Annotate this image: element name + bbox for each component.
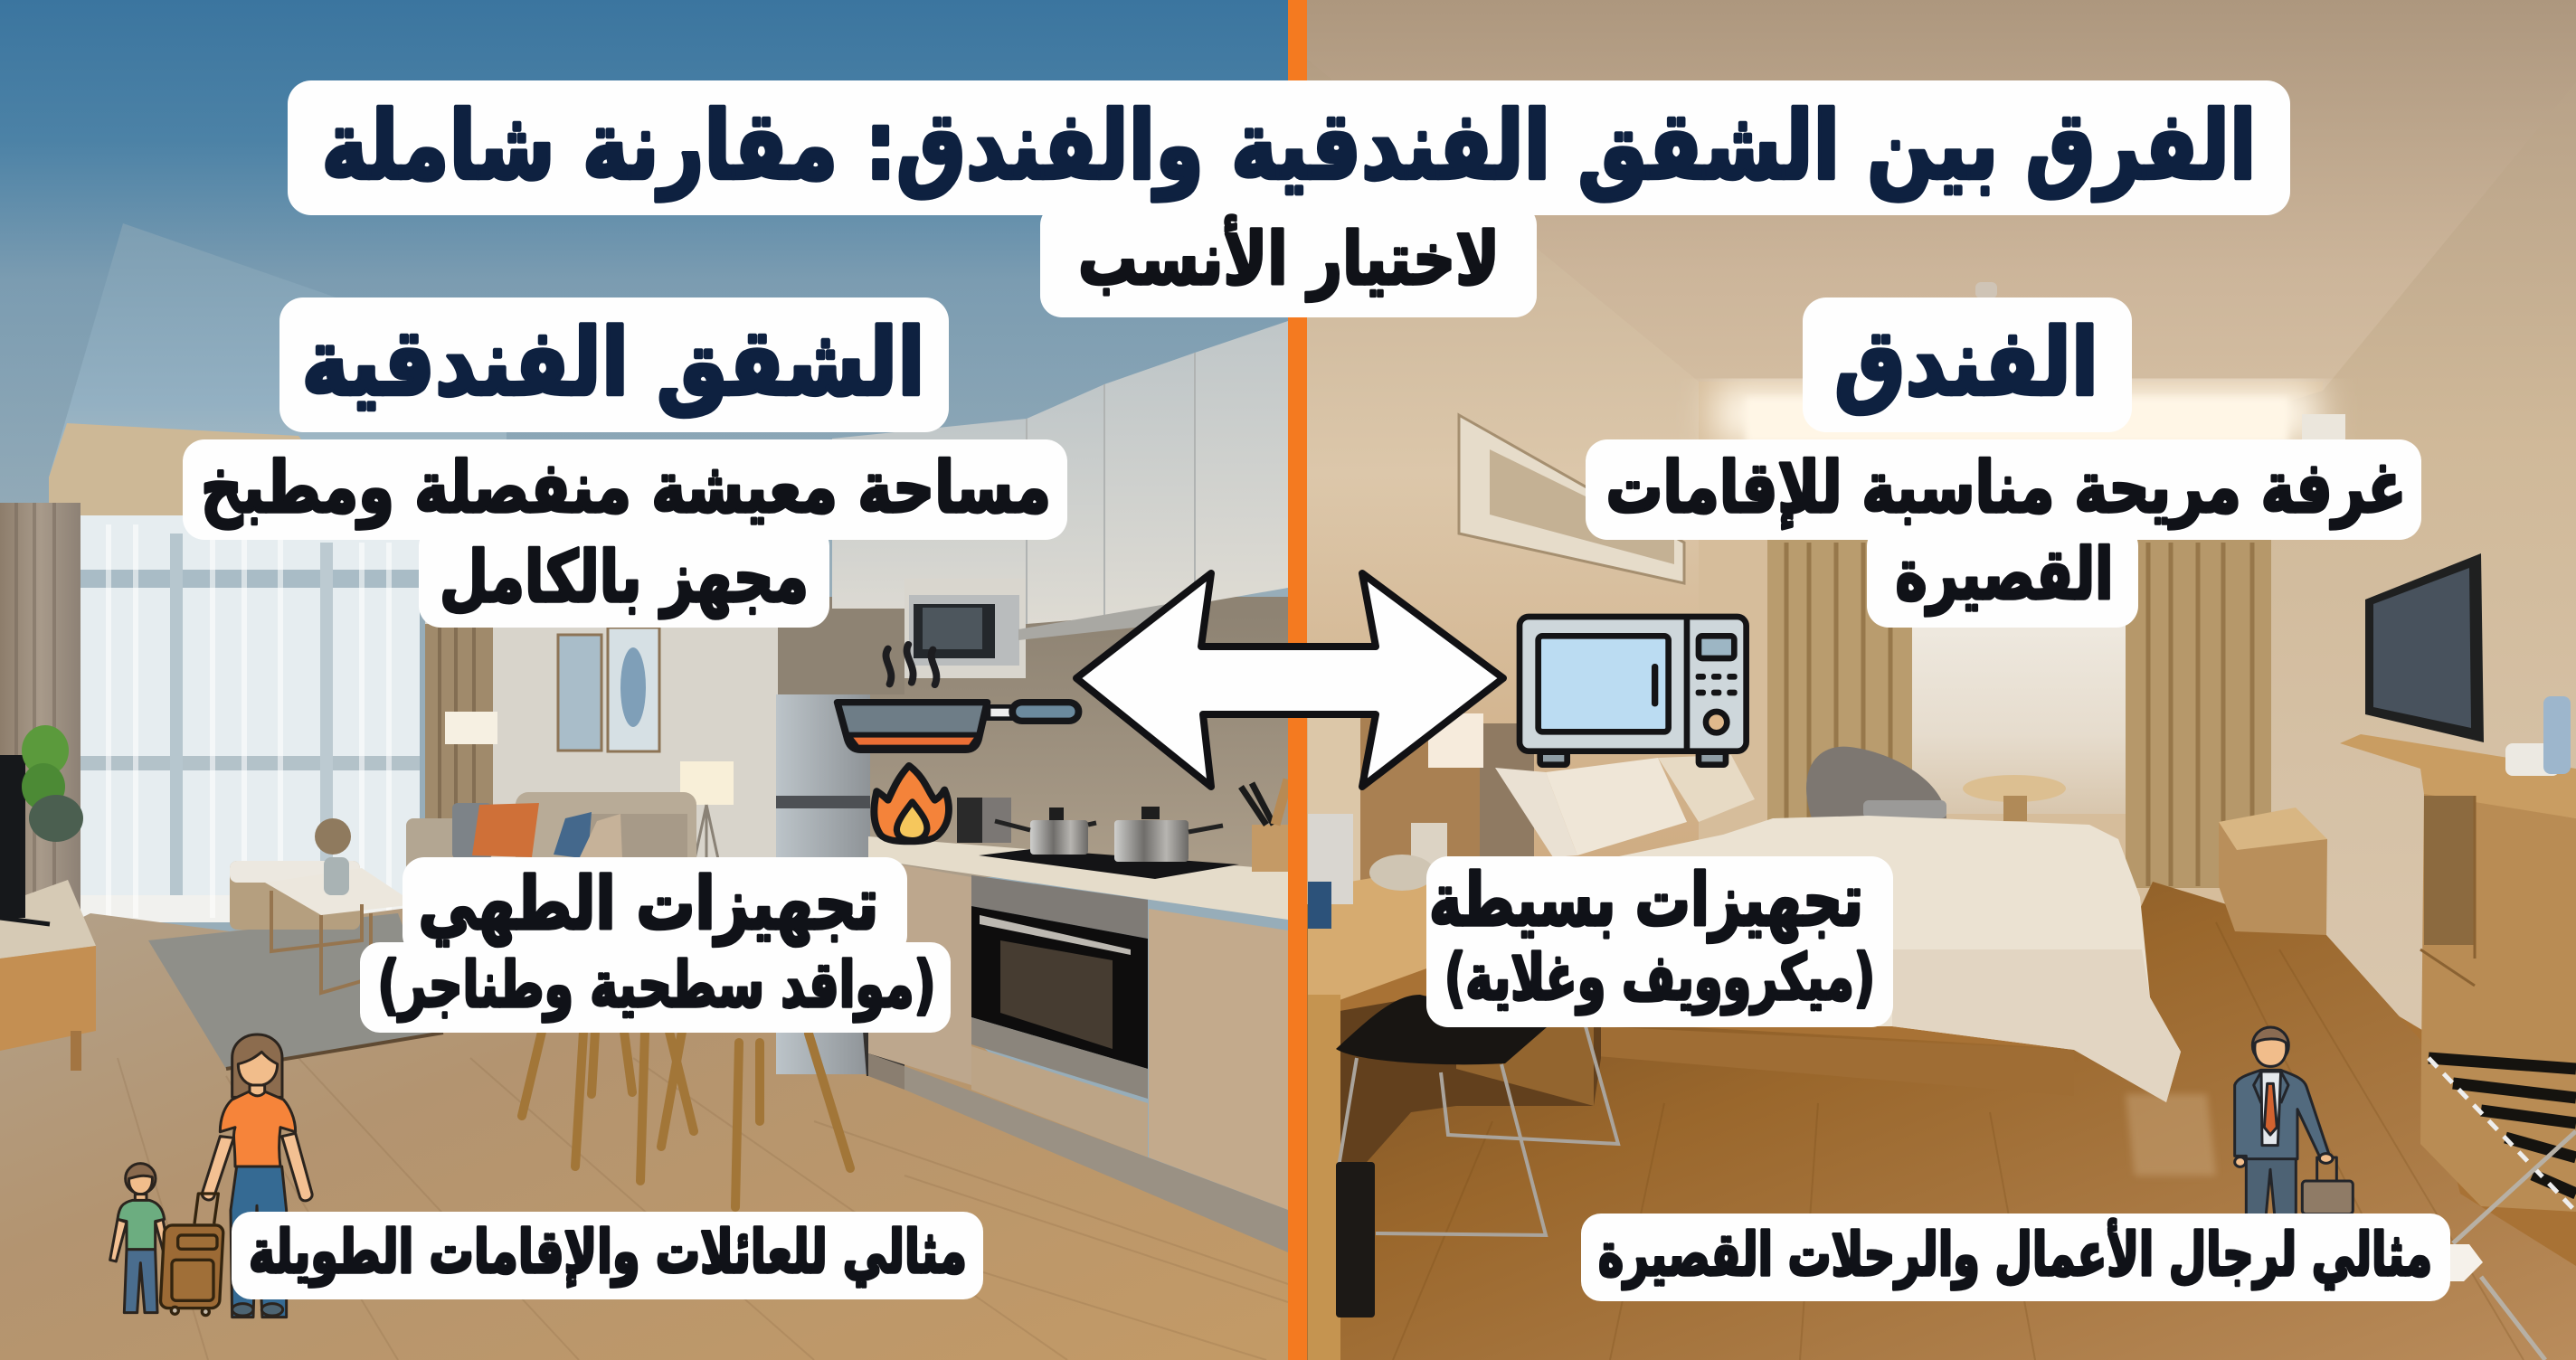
bench — [2219, 808, 2327, 935]
trash bin — [1336, 1162, 1375, 1318]
scene: serviced apartment room — [0, 0, 1288, 1360]
buttons — [1696, 674, 1738, 695]
suitcase — [160, 1194, 223, 1316]
pillows and bed — [1495, 755, 2181, 1102]
briefcase — [2317, 1157, 2336, 1182]
panel: hotel description — [1586, 439, 2421, 628]
floor reflection — [2126, 1094, 2216, 1176]
ceiling cove — [49, 423, 380, 543]
text: simple equipment line 1: تجهيزات بسيطة — [1429, 858, 1863, 943]
text: simple equipment line 2: (ميكروويف وغلاية) — [1444, 940, 1875, 1015]
desk — [1308, 814, 1483, 1360]
dial — [1706, 712, 1727, 732]
jacket — [2235, 1070, 2329, 1159]
tv console and cabinet — [2340, 696, 2576, 1212]
panel: simple equipment — [1426, 856, 1893, 1027]
panel: main title — [288, 80, 2290, 215]
steam — [886, 645, 936, 685]
text: apartment description line 1: مساحة معيشة منفصلة ومطبخ — [201, 448, 1051, 529]
niche and microwave — [778, 579, 1167, 694]
upper cabinets — [832, 321, 1288, 624]
flame — [874, 766, 949, 842]
curtains living room — [0, 503, 493, 910]
fridge — [776, 694, 904, 1076]
panel: apartment column heading — [279, 298, 949, 432]
text: cooking equipment line 1: تجهيزات الطهي — [418, 862, 879, 947]
pan body — [838, 703, 987, 750]
picture — [1459, 415, 1684, 583]
living room wall — [425, 543, 805, 877]
floor — [0, 859, 1288, 1360]
rug — [148, 913, 443, 1069]
woman — [202, 1034, 312, 1318]
text: apartment description line 2: مجهز بالكامل — [440, 537, 809, 619]
trousers — [2246, 1157, 2296, 1218]
lower cabinets and oven — [868, 859, 1288, 1252]
icon: double arrow — [1076, 573, 1503, 787]
text: hotel description line 2: القصيرة — [1896, 534, 2113, 616]
under desk shadow and block — [1330, 986, 1601, 1194]
pan handle — [989, 706, 1013, 719]
dining table legs — [522, 1032, 850, 1207]
feet — [1540, 752, 1567, 765]
heading: hotel: الفندق — [1834, 309, 2098, 417]
window with sheer — [80, 515, 420, 922]
back wall — [1699, 382, 2323, 924]
wood headboard panel and wall lamp — [1308, 713, 1534, 895]
text: cooking equipment line 2: (مواقد سطحية وطناجر) — [378, 948, 935, 1022]
panel: hotel column heading — [1803, 298, 2132, 432]
tv — [2365, 553, 2484, 742]
panel: subtitle — [1040, 203, 1537, 317]
body — [1520, 617, 1747, 751]
pots and knife block — [957, 779, 1288, 872]
panel: apartment ideal for — [232, 1212, 983, 1299]
head — [2252, 1027, 2288, 1063]
luggage rack — [2429, 1058, 2576, 1360]
kitchen back wall — [778, 597, 1288, 877]
smoke detector — [1975, 282, 1997, 298]
right wall — [2271, 82, 2576, 1121]
floor — [1308, 882, 2576, 1360]
armchair and side table — [1806, 747, 2066, 821]
icon: businessman with briefcase — [2235, 1027, 2353, 1218]
tv unit — [0, 725, 96, 1071]
ottoman and coffee table — [230, 818, 416, 993]
heading: serviced apartments: الشقق الفندقية — [302, 309, 924, 417]
curtains — [1767, 540, 1912, 847]
sofa — [406, 792, 696, 874]
subtitle text: لاختيار الأنسب — [1078, 215, 1500, 302]
ceiling panel — [49, 223, 507, 543]
lamps — [445, 712, 497, 744]
center orange divider — [1288, 0, 1307, 1360]
kitchen counter and cooktop — [868, 836, 1288, 920]
wall art — [558, 628, 659, 751]
panel: cooking equipment — [360, 857, 951, 1033]
icon: mother, child and suitcase — [110, 1034, 312, 1318]
panel: hotel ideal for — [1581, 1214, 2450, 1301]
ceiling glow — [1715, 384, 2318, 443]
window sheer — [1912, 615, 2126, 814]
child — [110, 1164, 169, 1313]
ac unit — [2302, 414, 2345, 445]
chair — [1336, 995, 1618, 1235]
icon: frying pan with steam and flame — [838, 645, 1078, 842]
panel: apartment description — [183, 439, 1067, 628]
door — [1539, 636, 1669, 732]
display — [1699, 636, 1734, 658]
icon: microwave — [1520, 617, 1747, 765]
text: hotel description line 1: غرفة مريحة مناسبة للإقامات — [1606, 448, 2406, 530]
scene: hotel room — [1288, 0, 2576, 1360]
text: ideal for families: مثالي للعائلات والإقامات الطويلة — [249, 1217, 967, 1288]
left wall — [1288, 43, 1773, 904]
